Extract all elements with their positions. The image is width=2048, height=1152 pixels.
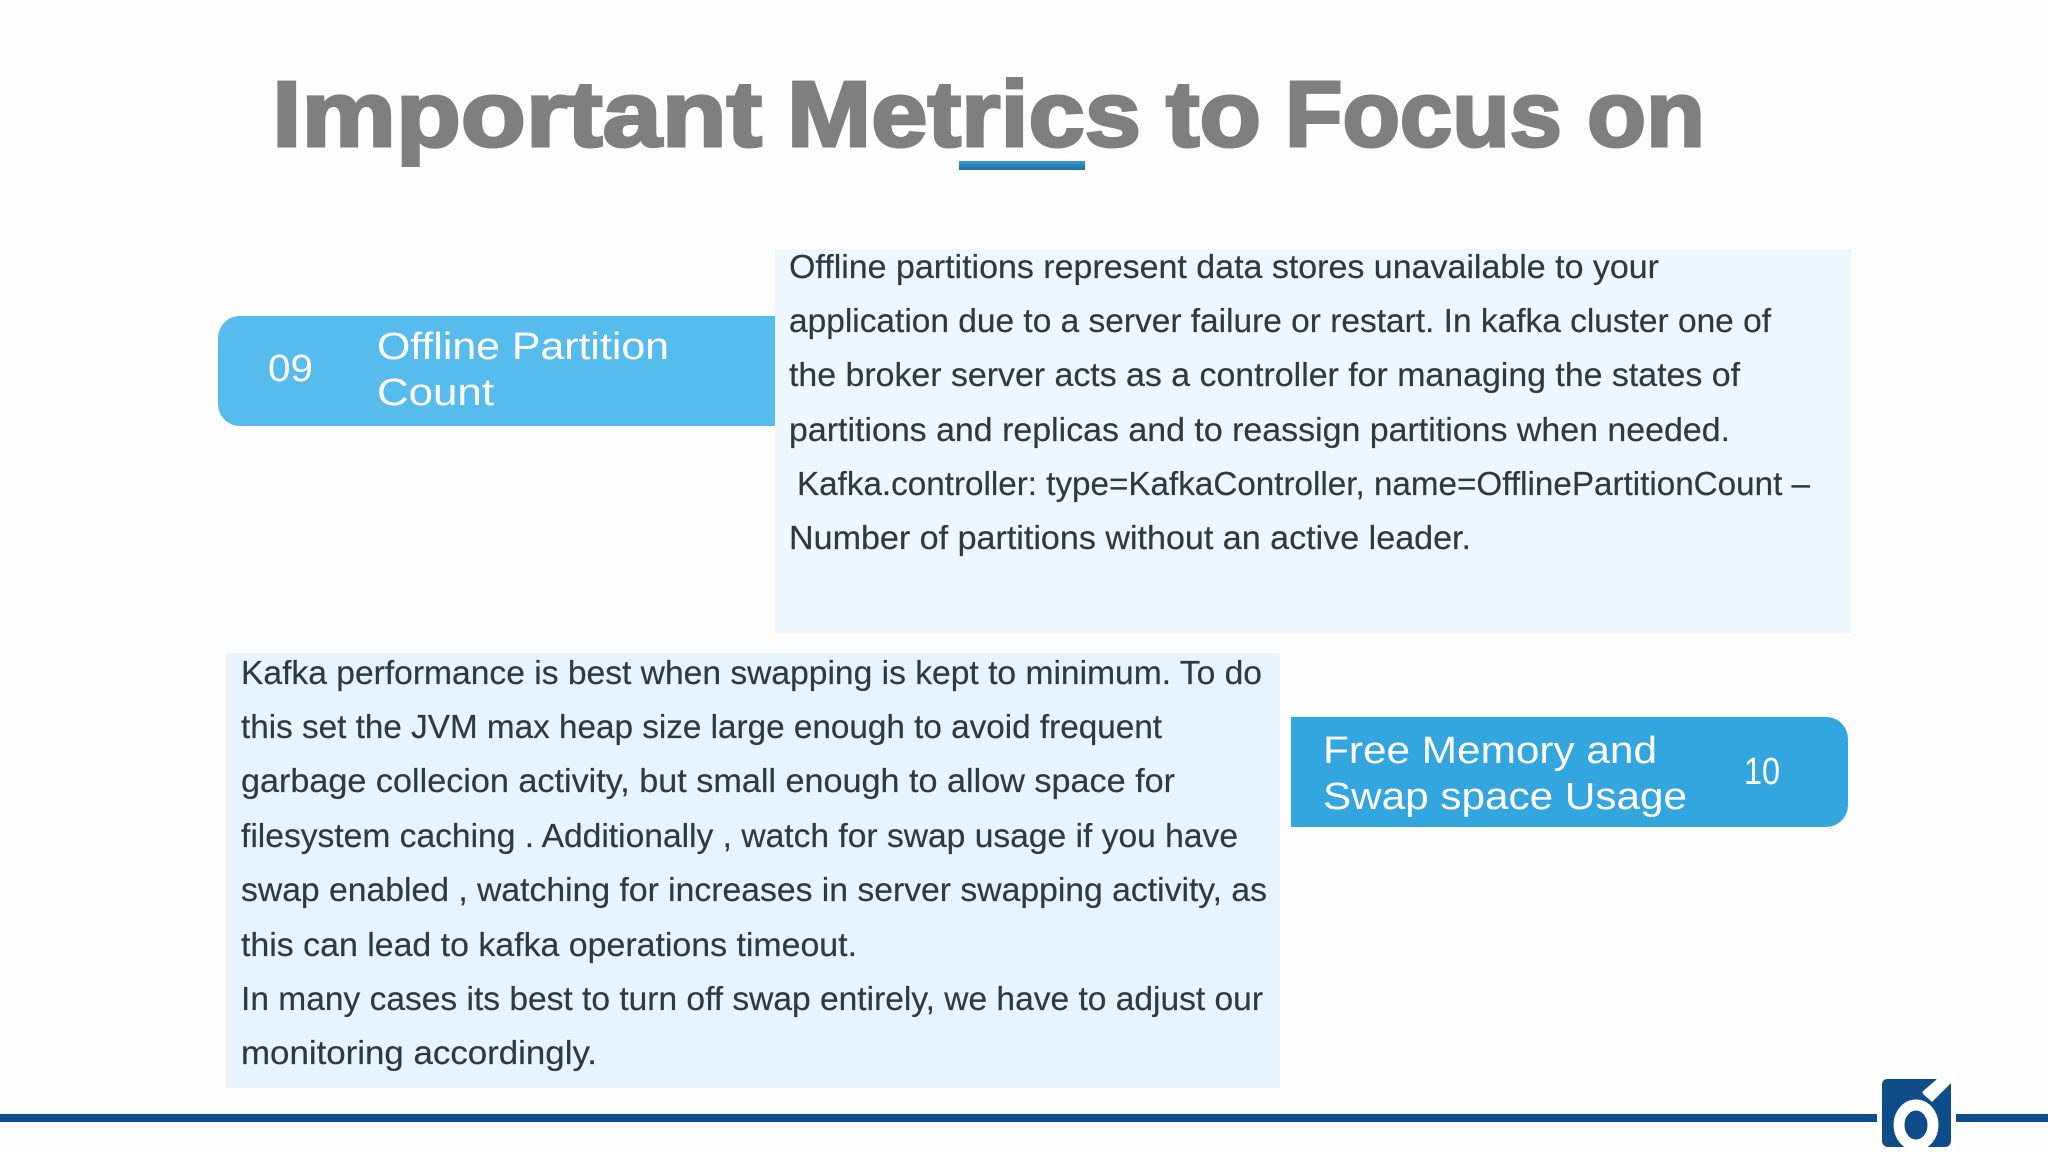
title: Important [272, 62, 762, 166]
label text: Offline Partition [377, 326, 669, 368]
title: on [1587, 62, 1705, 166]
label bar 10: free memory and swap space usage [1291, 717, 1848, 827]
label text: Count [377, 372, 495, 414]
number 09: 09 [268, 348, 313, 390]
description text: offline partitions: Offline partitions represent data stores unavailable to your [789, 248, 1659, 285]
description text: free memory: Kafka performance is best when swapping is kept to minimum. To do [241, 654, 1262, 691]
description text: offline partitions: the broker server acts as a controller for managing the states of [789, 356, 1741, 393]
title: Focus [1285, 62, 1562, 166]
description text: free memory: garbage collecion activity, but small enough to allow space for [241, 762, 1175, 799]
title: to [1166, 62, 1261, 166]
label text: Free Memory and [1323, 730, 1657, 772]
title underline [959, 161, 1085, 170]
description text: offline partitions: application due to a server failure or restart. In kafka cluster one of [789, 302, 1772, 339]
description text: free memory: monitoring accordingly. [241, 1034, 597, 1071]
footer rule [0, 1114, 2048, 1122]
title: Metrics [787, 62, 1141, 166]
description text: offline partitions: partitions and replicas and to reassign partitions when needed. [789, 411, 1730, 448]
description text: free memory: filesystem caching . Additionally , watch for swap usage if you have [241, 817, 1238, 854]
number 10: 10 [1744, 751, 1780, 793]
description text: free memory: this set the JVM max heap size large enough to avoid frequent [241, 708, 1162, 745]
label text: Swap space Usage [1323, 776, 1687, 818]
description text: free memory [241, 654, 1267, 1071]
description text: free memory: In many cases its best to turn off swap entirely, we have to adjust our [241, 980, 1263, 1017]
panel: offline partition description [775, 248, 1851, 633]
panel: free memory description [226, 653, 1280, 1088]
label bar 09: offline partition count [218, 316, 775, 426]
description text: free memory: swap enabled , watching for increases in server swapping activity, as [241, 871, 1267, 908]
description text: offline partitions: Kafka.controller: type=KafkaController, name=OfflinePartitionCount – [797, 465, 1811, 502]
description text: offline partitions [789, 248, 1811, 556]
logo [1877, 1070, 1956, 1152]
description text: offline partitions: Number of partitions without an active leader. [789, 519, 1471, 556]
description text: free memory: this can lead to kafka operations timeout. [241, 926, 857, 963]
